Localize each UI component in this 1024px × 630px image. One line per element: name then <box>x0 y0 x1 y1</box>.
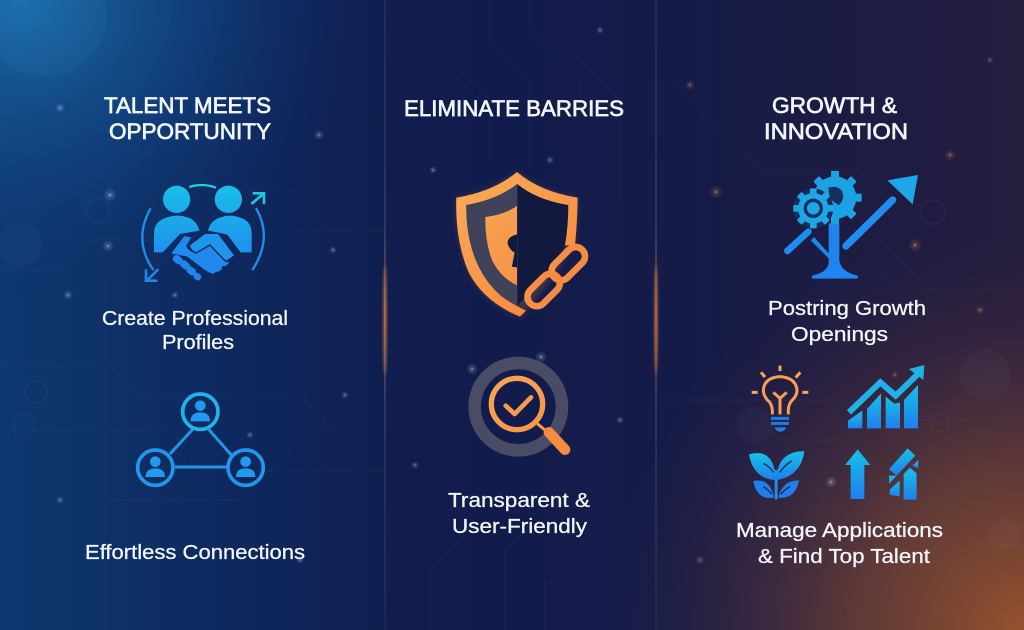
text: create professional profiles: Create Professional <box>102 308 288 330</box>
text: transparent and user-friendly: User-Friendly <box>452 516 587 538</box>
heading: growth and innovation: GROWTH & <box>772 93 897 118</box>
icon: broken arrow bars <box>889 448 918 500</box>
panel: eliminate barriers <box>404 96 624 538</box>
icon group: small growth icons <box>749 365 924 500</box>
panel: talent meets opportunity <box>85 93 305 564</box>
icon: shield with keyhole and chain link <box>456 172 589 317</box>
icon: bar chart with trend arrow <box>848 365 924 428</box>
icon: up arrow <box>845 449 870 499</box>
text: postring growth openings: Postring Growth <box>768 298 926 320</box>
text: manage applications and find top talent: & Find Top Talent <box>758 546 930 568</box>
icon: gears tree and growth arrow <box>787 171 918 279</box>
heading: growth and innovation: INNOVATION <box>764 119 908 144</box>
panel: growth and innovation <box>736 93 943 568</box>
heading: talent meets opportunity: OPPORTUNITY <box>109 119 271 144</box>
icon: handshake with two people <box>142 185 264 282</box>
text: manage applications and find top talent: Manage Applications <box>736 520 943 542</box>
heading: talent meets opportunity: TALENT MEETS <box>104 93 271 118</box>
text: effortless connections: Effortless Connections <box>85 542 305 564</box>
big gear <box>808 171 862 224</box>
text: transparent and user-friendly: Transparent & <box>448 490 591 512</box>
icon: magnifying glass with checkmark <box>475 363 565 450</box>
icon: sprout <box>749 451 804 499</box>
text: postring growth openings: Openings <box>791 324 888 346</box>
icon: light bulb <box>752 366 808 432</box>
text: manage applications and find top talent <box>736 520 943 568</box>
divider: right <box>654 0 658 630</box>
text: create professional profiles: Profiles <box>162 332 234 354</box>
heading: talent meets opportunity <box>104 93 271 144</box>
divider: left <box>382 0 388 630</box>
text: transparent and user-friendly <box>448 490 591 538</box>
text: postring growth openings <box>768 298 926 346</box>
heading: eliminate barries: ELIMINATE BARRIES <box>404 96 624 121</box>
icon: connected people network <box>138 394 263 485</box>
heading: growth and innovation <box>764 93 908 144</box>
text: create professional profiles <box>102 308 288 354</box>
small gear <box>793 188 833 228</box>
